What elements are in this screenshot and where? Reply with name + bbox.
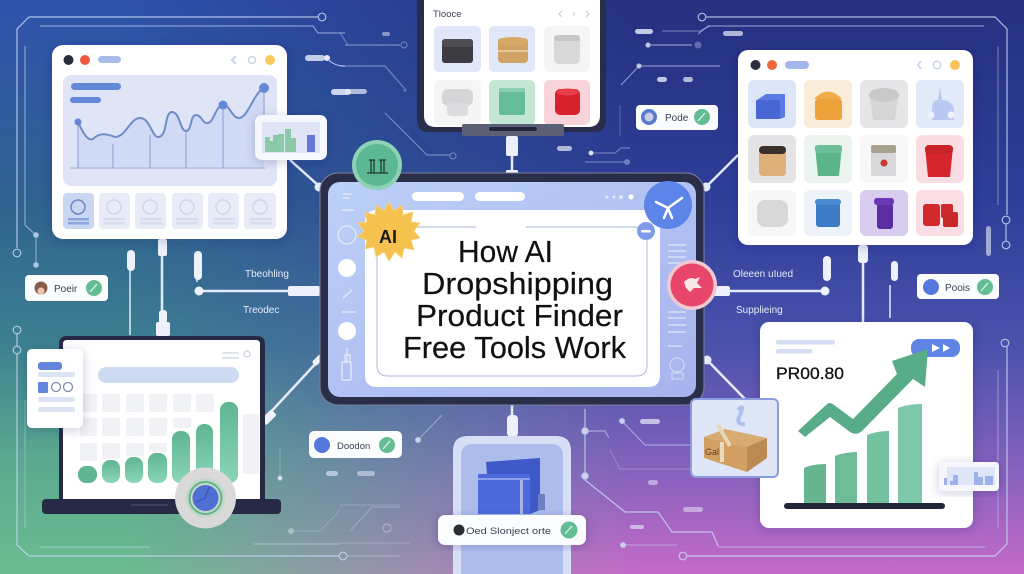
slider knob: [637, 222, 655, 240]
product: silver pail: [869, 88, 899, 120]
product: green jar: [815, 145, 842, 176]
icon: round blue pie badge: [175, 468, 236, 528]
icon: green table badge: [352, 140, 402, 190]
product: green box: [499, 88, 525, 115]
price value: PR00.80: [776, 364, 844, 383]
pill: Poeir: [25, 275, 108, 301]
title: Dropshipping: [422, 266, 613, 301]
pill: product label: Oed Slonject orte: [466, 526, 551, 537]
pill: Poois: Poois: [945, 283, 970, 294]
title: Free Tools Work: [403, 330, 626, 365]
icon: blue box: [478, 458, 545, 514]
label: Tbeohling: Tbeohling: [245, 269, 289, 280]
growth arrow: [798, 349, 928, 437]
icon: AI starburst badge: AI: [379, 227, 397, 247]
decorative dashes: [305, 29, 991, 529]
icon: cardboard box: Gal: [705, 447, 719, 457]
pill: Doodon: Doodon: [337, 441, 370, 452]
product: dark jar: [442, 39, 473, 63]
connector plugs: [127, 136, 898, 437]
panel label: Tlooce: [433, 9, 462, 20]
window controls: [750, 60, 960, 70]
panel: product tray tablet: [417, 0, 606, 136]
pill: Poois: [917, 274, 999, 299]
product: blue jar: [815, 199, 841, 227]
pill: Doodon: [309, 431, 402, 458]
growth bars: [784, 404, 945, 509]
icon: blue plane badge: [644, 181, 692, 229]
product: orange jar: [814, 92, 842, 120]
title card: [365, 210, 660, 387]
pill: Poeir: Poeir: [54, 284, 78, 295]
tablet stand: [462, 124, 564, 136]
icon: AI starburst badge: [358, 202, 420, 261]
panel: product catalog grid: [738, 50, 973, 245]
tablet top bar pills: [412, 192, 634, 201]
product box card: [691, 399, 778, 477]
line chart: [70, 83, 269, 168]
mini bar chart card: [939, 462, 999, 491]
panel: central tablet: [320, 173, 704, 405]
panel: line chart dashboard: [52, 45, 287, 239]
floating form card: [27, 349, 83, 428]
product tiles row: [63, 193, 276, 229]
product: blue box: [756, 94, 785, 119]
bar chart: [78, 402, 238, 483]
sidebar icons right: [668, 245, 686, 379]
product: red cases: [923, 204, 958, 227]
pill: Pode: Pode: [665, 113, 689, 124]
sidebar icons left: [338, 194, 356, 380]
window controls: [64, 55, 275, 65]
product: white cap: [757, 200, 788, 227]
icon: red rabbit badge: [667, 260, 717, 310]
product: tan jar with label: [759, 146, 786, 176]
label: Oleeen uIued: Oleeen uIued: [733, 269, 793, 280]
panel: phone with product: [453, 436, 571, 574]
pill: product label: [438, 515, 586, 545]
panel: sales bar chart laptop: [42, 336, 281, 514]
product: red jar: [925, 145, 953, 177]
product: tin: [871, 145, 896, 176]
play pill: [911, 339, 960, 357]
title: How AI: [458, 234, 553, 269]
title: Product Finder: [416, 298, 623, 333]
panel: price growth card: [760, 322, 973, 528]
label: Supplieing: Supplieing: [736, 305, 783, 316]
mini bar chart card: [255, 115, 327, 160]
connector cables: [130, 136, 890, 436]
product: purple bottle: [874, 198, 894, 229]
product: white cap: [442, 89, 473, 116]
product: tan jar: [498, 37, 528, 63]
pill: Pode: [636, 105, 718, 130]
product: red jar: [555, 88, 580, 115]
product: blue dispenser: [928, 87, 954, 120]
background cell grid: [80, 394, 259, 474]
title: [403, 234, 626, 365]
product: silver jar: [554, 35, 580, 64]
label: Treodec: Treodec: [243, 305, 279, 316]
